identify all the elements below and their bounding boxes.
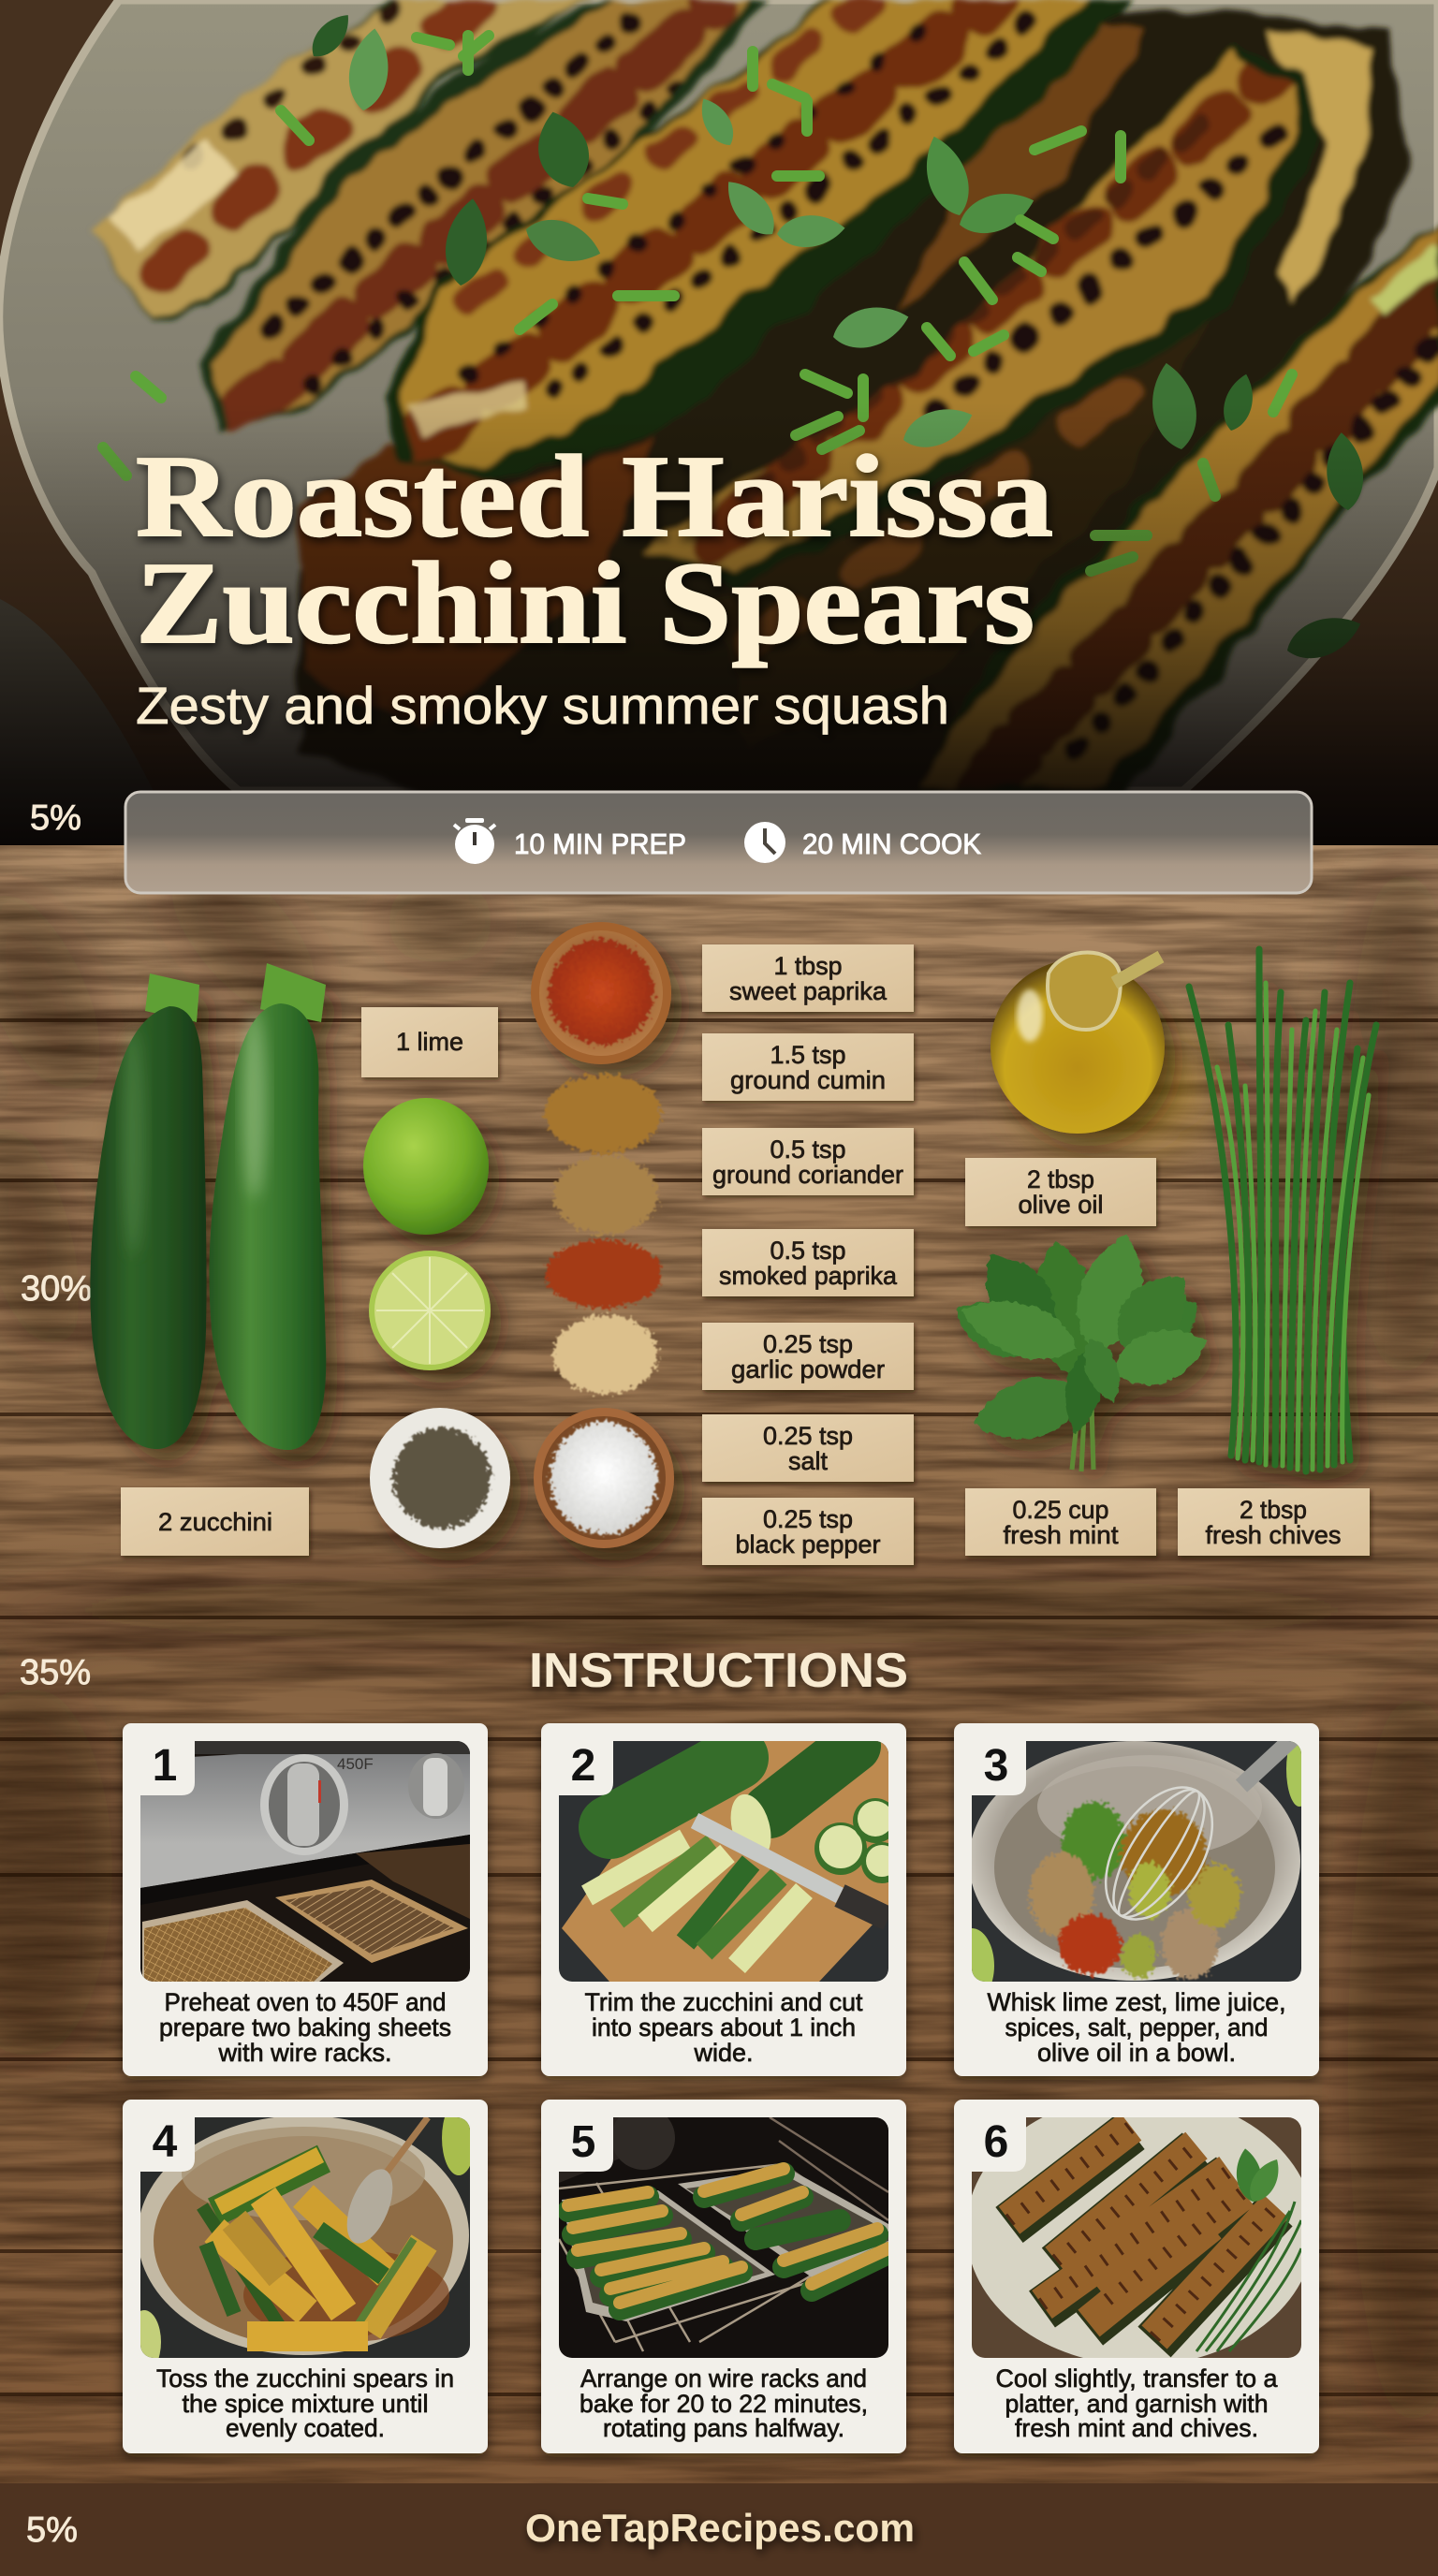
- caption: spices, salt, pepper, and: [1005, 2013, 1268, 2042]
- percent label 5% bottom: 5%: [26, 2510, 78, 2550]
- caption: Cool slightly, transfer to a: [996, 2364, 1278, 2393]
- label: 0.25 cup fresh mint: fresh mint: [1004, 1521, 1119, 1549]
- title: Zucchini Spears: [136, 539, 1034, 668]
- label: 2 tbsp fresh chives: fresh chives: [1206, 1521, 1341, 1549]
- prep time: 10 MIN PREP: [514, 827, 686, 860]
- time bar: [125, 792, 1312, 893]
- caption: platter, and garnish with: [1005, 2390, 1268, 2418]
- label: 1.5 tsp ground cumin: ground cumin: [730, 1066, 886, 1094]
- caption: [987, 1988, 1286, 2067]
- title: [136, 432, 1053, 668]
- spear D: [728, 45, 1318, 587]
- label: 0.5 tsp ground coriander: ground coriander: [712, 1161, 903, 1189]
- spear A: [92, 0, 590, 323]
- bowl of sweet paprika: [531, 922, 671, 1064]
- caption: Arrange on wire racks and: [580, 2364, 867, 2393]
- icon: stopwatch: [454, 818, 495, 864]
- label: 0.25 tsp salt: salt: [788, 1447, 828, 1475]
- label: 2 tbsp fresh chives: 2 tbsp: [1240, 1496, 1307, 1524]
- label: 2 zucchini: 2 zucchini: [158, 1508, 272, 1536]
- percent label 30%: 30%: [21, 1269, 92, 1309]
- caption: Whisk lime zest, lime juice,: [987, 1988, 1286, 2016]
- mint bunch: [945, 1227, 1214, 1471]
- label: 0.25 tsp black pepper: 0.25 tsp: [763, 1505, 853, 1533]
- step number badge: [139, 1740, 195, 1795]
- panel: ingredients: [90, 922, 1376, 1565]
- step number badge: [971, 1740, 1026, 1795]
- label: 0.5 tsp ground coriander: [702, 1128, 914, 1195]
- step number badge: 4: [153, 2117, 178, 2167]
- label: 1.5 tsp ground cumin: [702, 1033, 914, 1101]
- caption: bake for 20 to 22 minutes,: [580, 2390, 868, 2418]
- caption: Preheat oven to 450F and: [165, 1988, 446, 2016]
- step card 3: [949, 1723, 1319, 2076]
- caption: olive oil in a bowl.: [1037, 2039, 1236, 2067]
- photo: whisking spices in a bowl: [949, 1732, 1313, 2003]
- photo: spears on racks in oven: [559, 2106, 888, 2358]
- label: 0.5 tsp smoked paprika: 0.5 tsp: [770, 1237, 846, 1265]
- label: 2 zucchini: [121, 1487, 309, 1556]
- label: 0.25 cup fresh mint: 0.25 cup: [1013, 1496, 1108, 1524]
- label: 2 tbsp fresh chives: [1178, 1488, 1370, 1556]
- back spears: [300, 0, 1409, 833]
- caption: [996, 2364, 1278, 2442]
- instructions heading: INSTRUCTIONS: [529, 1644, 908, 1698]
- caption: wide.: [694, 2039, 753, 2067]
- photo: cutting zucchini on board: [559, 1741, 902, 1982]
- caption: evenly coated.: [226, 2414, 385, 2442]
- caption: prepare two baking sheets: [159, 2013, 451, 2042]
- label: 2 tbsp olive oil: olive oil: [1019, 1191, 1103, 1219]
- spear C main: [386, 0, 1135, 482]
- caption: into spears about 1 inch: [592, 2013, 856, 2042]
- step card 5: [541, 2100, 906, 2453]
- spear E: [974, 221, 1438, 790]
- step number badge: 1: [153, 1741, 177, 1791]
- photo: tossing spears in spice mix: [127, 2100, 476, 2374]
- label: 0.25 tsp garlic powder: [702, 1323, 914, 1390]
- step number badge: [558, 2116, 613, 2172]
- label: 0.25 tsp salt: 0.25 tsp: [763, 1422, 853, 1450]
- caption: Toss the zucchini spears in: [156, 2364, 454, 2393]
- lime half: [369, 1251, 491, 1370]
- cook time: 20 MIN COOK: [802, 827, 981, 860]
- footer band: [0, 2483, 1438, 2576]
- label: 1.5 tsp ground cumin: 1.5 tsp: [770, 1041, 846, 1069]
- label: 2 tbsp olive oil: 2 tbsp: [1027, 1165, 1094, 1193]
- label: 0.25 tsp black pepper: [702, 1498, 914, 1565]
- step card 2: [541, 1723, 906, 2076]
- label: 0.25 tsp garlic powder: 0.25 tsp: [763, 1330, 853, 1358]
- caption: with wire racks.: [217, 2039, 391, 2067]
- chives bundle: [1189, 949, 1376, 1471]
- website: OneTapRecipes.com: [525, 2506, 915, 2550]
- photo: oven dial and baking sheets: 450F: [337, 1755, 374, 1773]
- photo: oven dial and baking sheets: [140, 1741, 470, 1982]
- bowl of black pepper: [370, 1408, 510, 1548]
- label: 2 tbsp olive oil: [965, 1158, 1156, 1226]
- wood tabletop background: [0, 827, 1438, 2576]
- caption: [580, 2364, 868, 2442]
- hero photo: grilled zucchini on plate: [0, 0, 1438, 845]
- bowl of salt: [534, 1408, 674, 1548]
- percent label 5% top: 5%: [30, 798, 81, 838]
- cumin pile: [545, 1075, 661, 1153]
- spear B: [198, 0, 768, 432]
- caption: [159, 1988, 451, 2067]
- caption: [156, 2364, 454, 2442]
- caption: fresh mint and chives.: [1015, 2414, 1258, 2442]
- step number badge: 3: [984, 1741, 1008, 1791]
- coriander pile: [553, 1155, 658, 1234]
- caption: [584, 1988, 863, 2067]
- step card 6: [954, 2094, 1319, 2453]
- step number badge: 5: [571, 2117, 595, 2167]
- subtitle: Zesty and smoky summer squash: [136, 676, 949, 735]
- percent label 35%: 35%: [20, 1653, 91, 1692]
- step number badge: [971, 2116, 1026, 2172]
- photo: plated spears with herbs: [966, 2094, 1314, 2365]
- whole lime: [363, 1098, 489, 1235]
- step number badge: 6: [984, 2117, 1008, 2167]
- icon: clock: [744, 822, 785, 863]
- mint leaves garnish: [304, 7, 1367, 667]
- label: 1 lime: [361, 1007, 498, 1077]
- label: 0.5 tsp ground coriander: 0.5 tsp: [770, 1135, 846, 1164]
- step number badge: 2: [571, 1741, 595, 1791]
- label: 1 tbsp sweet paprika: [702, 944, 914, 1012]
- olive oil jar: [990, 953, 1198, 1142]
- step number badge: [139, 2116, 195, 2172]
- chives garnish: [103, 36, 1292, 571]
- label: 1 tbsp sweet paprika: 1 tbsp: [773, 952, 843, 980]
- label: 0.25 tsp salt: [702, 1414, 914, 1482]
- label: 0.25 tsp black pepper: black pepper: [736, 1530, 881, 1559]
- label: 0.5 tsp smoked paprika: smoked paprika: [719, 1262, 898, 1290]
- step card 1: [123, 1723, 488, 2076]
- step card 4: [123, 2100, 488, 2453]
- caption: the spice mixture until: [182, 2390, 429, 2418]
- zucchini pair: [90, 963, 326, 1450]
- label: 0.25 cup fresh mint: [965, 1488, 1156, 1556]
- label: 0.25 tsp garlic powder: garlic powder: [731, 1355, 885, 1383]
- label: 1 lime: 1 lime: [396, 1028, 463, 1056]
- step number badge: [558, 1740, 613, 1795]
- garlic powder pile: [553, 1315, 658, 1394]
- label: 1 tbsp sweet paprika: sweet paprika: [729, 977, 888, 1005]
- caption: rotating pans halfway.: [603, 2414, 844, 2442]
- label: 0.5 tsp smoked paprika: [702, 1229, 914, 1296]
- title: Roasted Harissa: [136, 432, 1053, 562]
- smoked paprika pile: [546, 1240, 662, 1308]
- caption: Trim the zucchini and cut: [584, 1988, 863, 2016]
